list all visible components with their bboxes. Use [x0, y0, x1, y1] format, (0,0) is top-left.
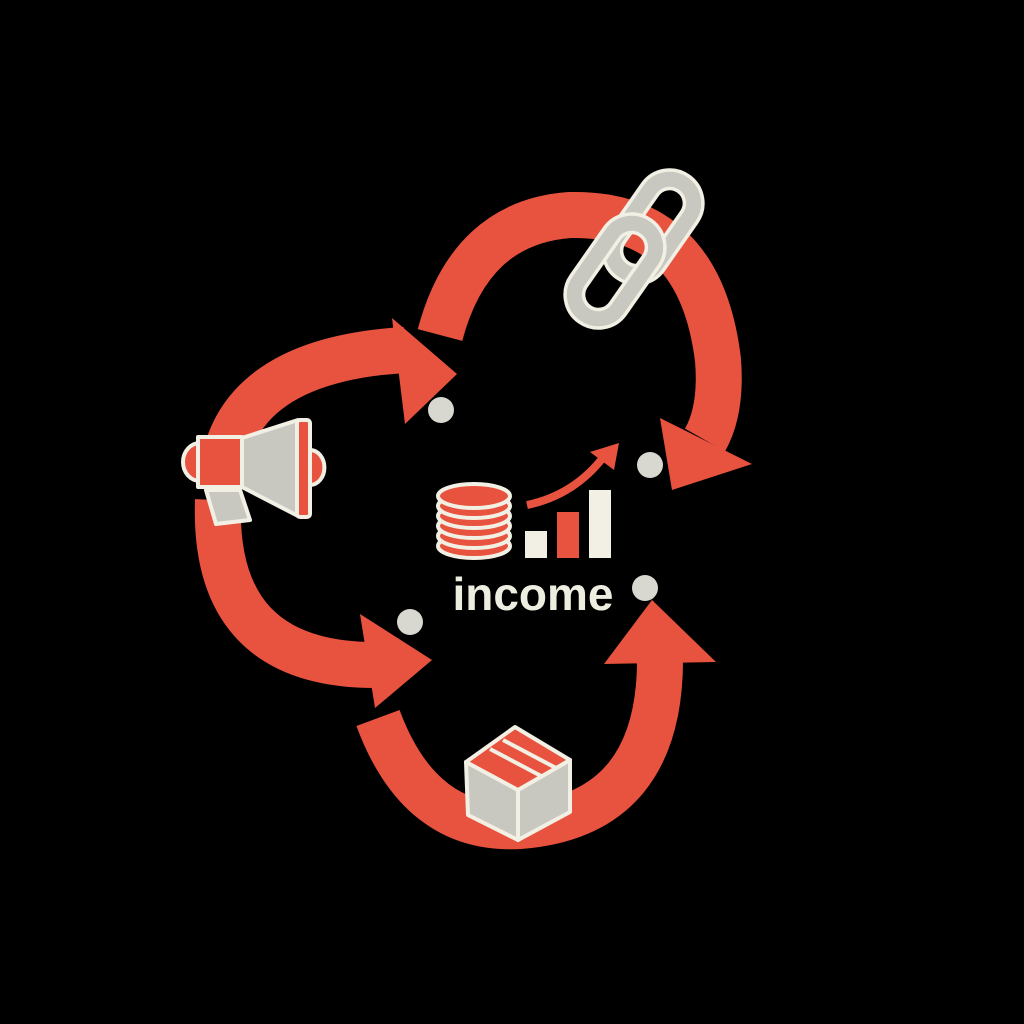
- text: income: income: [452, 568, 614, 620]
- icon: megaphone: [183, 420, 324, 524]
- icon: coins and chart: [438, 443, 619, 558]
- icon: chain: [565, 170, 703, 328]
- icon: box: [466, 727, 570, 840]
- arrow: lower left arc: [218, 500, 432, 708]
- arrow: bottom arc: [378, 600, 716, 826]
- dots: [397, 397, 663, 635]
- arrow: top arc: [440, 215, 752, 490]
- arrow: upper left arc: [222, 318, 457, 475]
